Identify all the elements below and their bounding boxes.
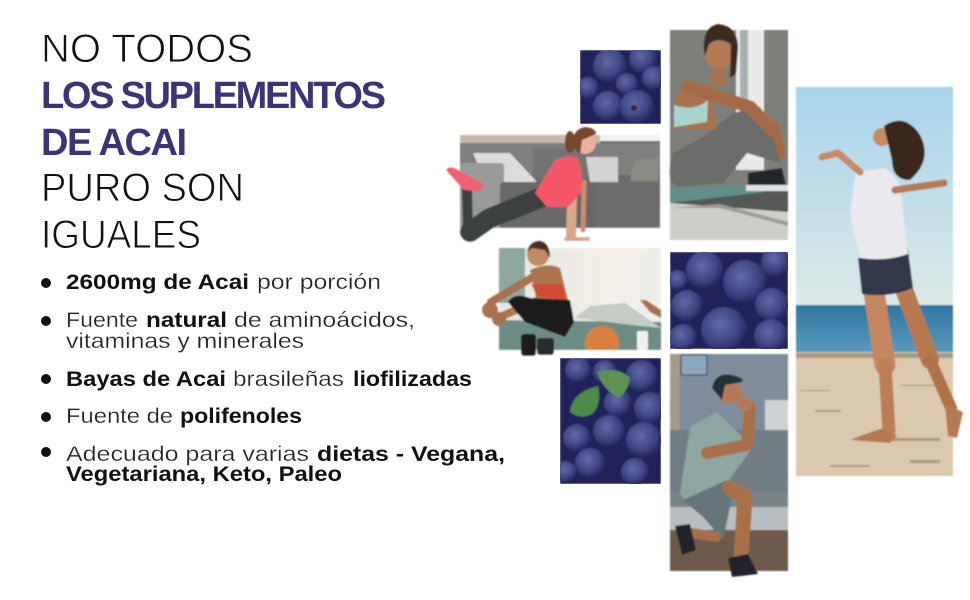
bullet: diets: dietas - Vegana,	[317, 443, 505, 466]
bullet: natural source: natural	[146, 309, 227, 332]
bullet: diets	[41, 443, 505, 486]
bullet: berries: Bayas de Acai	[66, 368, 226, 391]
bullet: berries: liofilizadas	[353, 368, 472, 391]
title: DE ACAI	[41, 122, 187, 164]
bullet: natural source: vitaminas y minerales	[66, 330, 304, 353]
bullet: polyphenols: Fuente de	[66, 405, 173, 428]
photo: blueberries medium	[670, 252, 788, 349]
bullet: berries	[41, 368, 472, 391]
title: PURO SON	[41, 166, 244, 210]
bullet: natural source	[41, 309, 415, 353]
bullet: natural source: de aminoácidos,	[234, 309, 415, 332]
bullet: berries: brasileñas	[233, 368, 344, 391]
bullet: diets: Vegetariana, Keto, Paleo	[66, 463, 342, 486]
photo: woman squatting outdoors	[482, 241, 661, 360]
bullet: 2600mg: por porción	[257, 271, 381, 294]
benefits list	[41, 271, 505, 486]
photo: woman on beach with arms open	[796, 87, 963, 476]
title: IGUALES	[41, 213, 201, 257]
photo: man doing lunge	[670, 354, 788, 577]
bullet: 2600mg	[41, 271, 381, 294]
bullet: natural source: Fuente	[66, 309, 138, 332]
bullet: diets: Adecuado para varias	[66, 443, 309, 466]
title: LOS SUPLEMENTOS	[41, 75, 386, 117]
bullet: polyphenols	[41, 405, 302, 428]
title	[41, 27, 386, 257]
title: NO TODOS	[41, 27, 253, 71]
bullet: polyphenols: polifenoles	[180, 405, 302, 428]
bullet: 2600mg: 2600mg de Acai	[66, 271, 249, 294]
photo: blueberries small	[580, 50, 661, 124]
photo: woman sitting on mat	[670, 24, 788, 240]
photo: blueberries with mint	[560, 358, 661, 484]
photo: woman exercising by sofa	[446, 127, 660, 248]
